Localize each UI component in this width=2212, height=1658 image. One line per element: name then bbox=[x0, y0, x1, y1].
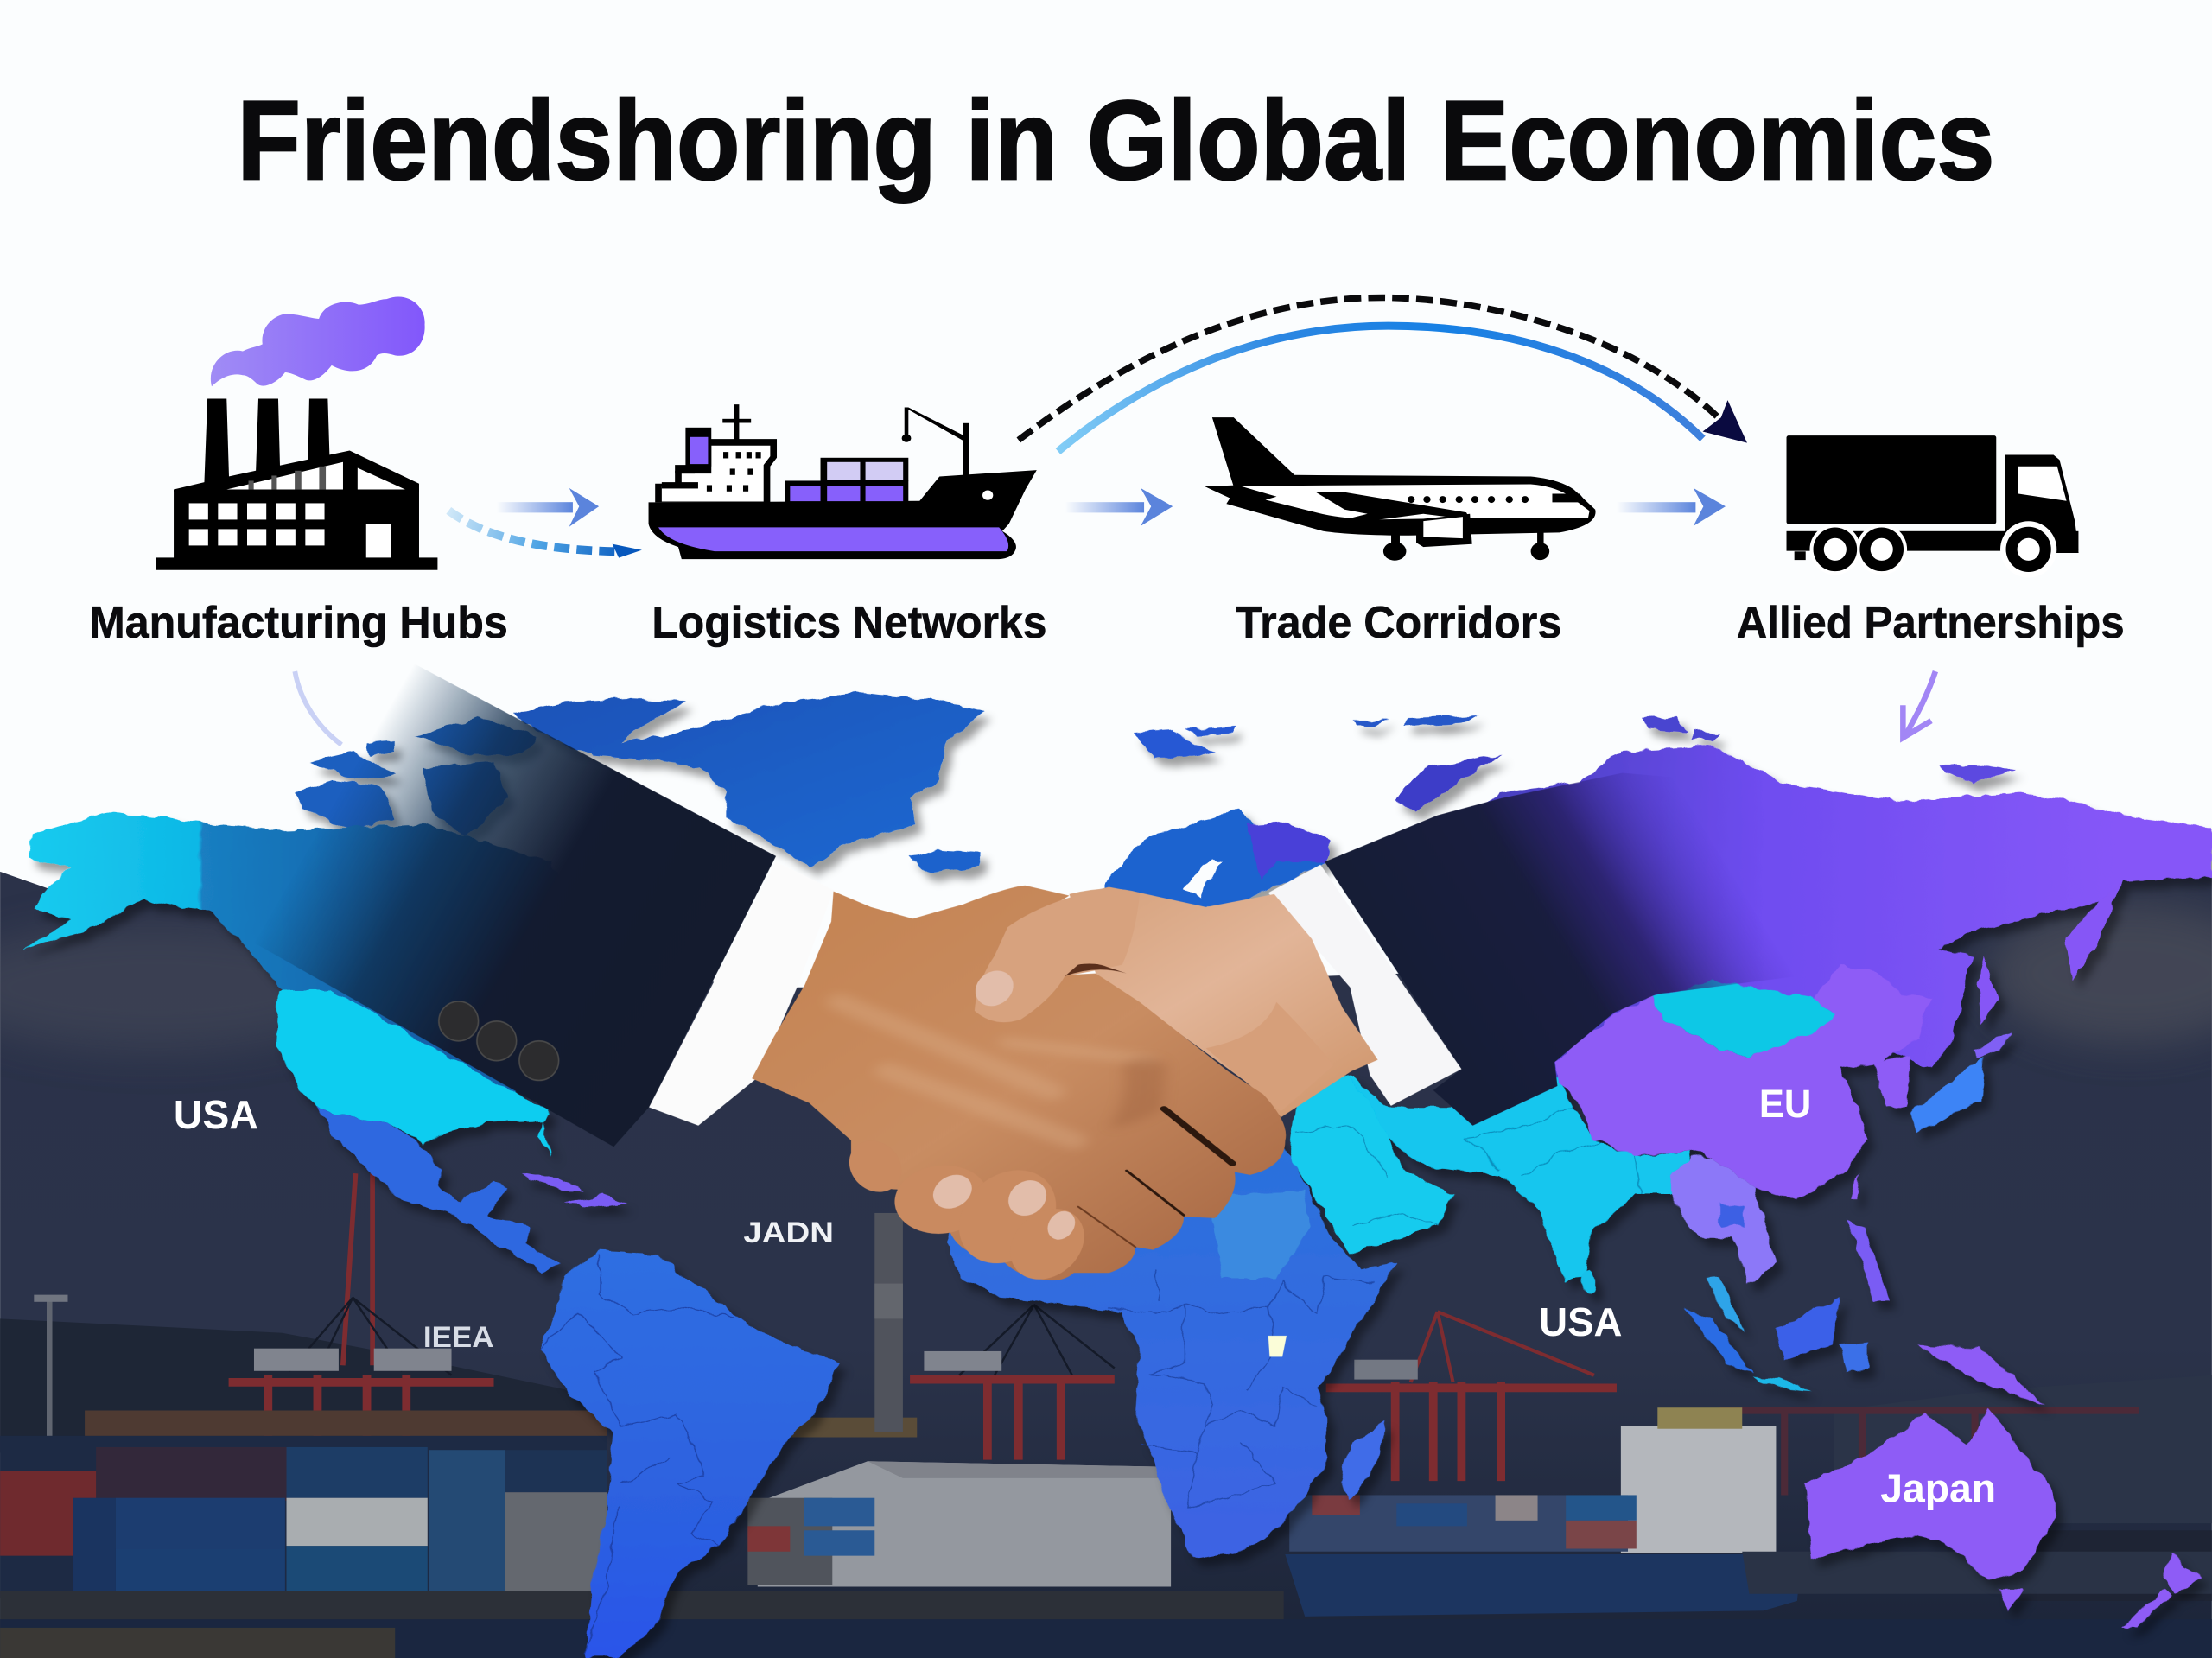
arrow: factory to ship bbox=[497, 488, 599, 527]
tendon highlights bbox=[840, 1002, 1148, 1140]
map: Eurasia Africa Oceania bbox=[948, 715, 2212, 1627]
map: Americas bbox=[22, 692, 984, 1657]
fingernails bbox=[926, 969, 1079, 1242]
map label: USA (Indian Ocean): USA bbox=[1539, 1299, 1622, 1344]
right hand palm bbox=[1069, 889, 1378, 1117]
pinky and fingertips bbox=[843, 1138, 1096, 1285]
map label: Japan: Japan bbox=[1880, 1466, 1996, 1511]
label: Manufacturing Hubs: Manufacturing Hubs bbox=[89, 598, 508, 648]
arrow: plane to truck bbox=[1617, 488, 1726, 526]
label: Logistics Networks: Logistics Networks bbox=[652, 598, 1046, 648]
left sleeve bbox=[183, 635, 776, 1147]
cargo ship in port bbox=[1621, 1426, 1776, 1553]
right shirt cuff bbox=[1268, 865, 1461, 1106]
handshake bbox=[752, 886, 1378, 1285]
crane group bbox=[229, 1173, 2139, 1495]
title: Friendshoring in Global Economics bbox=[237, 77, 1994, 203]
arrow: dashed arc over plane bbox=[1019, 297, 1719, 440]
label: Allied Partnerships: Allied Partnerships bbox=[1737, 598, 2125, 648]
icon: small marker in East Africa bbox=[1268, 1336, 1287, 1356]
icon: truck bbox=[1787, 435, 2079, 578]
right thumb bbox=[975, 887, 1140, 1022]
icon: cargo ship bbox=[649, 404, 1037, 559]
label: Trade Corridors: Trade Corridors bbox=[1236, 598, 1561, 648]
finger gaps bbox=[963, 1109, 1232, 1247]
left hand back bbox=[752, 886, 1286, 1280]
world map bbox=[22, 692, 2212, 1657]
map label: JADN: JADN bbox=[743, 1217, 834, 1249]
map label: IEEA: IEEA bbox=[423, 1321, 493, 1354]
left shirt cuff bbox=[649, 861, 834, 1126]
knuckle shadow bbox=[1109, 1057, 1166, 1129]
arrow: dashed factory to ship bbox=[448, 511, 642, 558]
warehouse bbox=[758, 1461, 1171, 1587]
background photo: port scene bbox=[0, 872, 2212, 1658]
arrow: partnerships down to map bbox=[1903, 671, 1936, 738]
map label: EU: EU bbox=[1759, 1082, 1811, 1126]
arrow: solid blue arc bbox=[1058, 326, 1703, 451]
icon: airplane bbox=[1205, 417, 1596, 561]
right sleeve bbox=[1325, 773, 1820, 1126]
map label: USA (west): USA bbox=[174, 1092, 258, 1137]
arrowhead: arc end bbox=[1703, 400, 1747, 443]
sleeve buttons bbox=[439, 1001, 559, 1080]
container stacks bbox=[0, 1436, 607, 1598]
icon: factory with smoke bbox=[156, 296, 437, 570]
dock bbox=[0, 1591, 1284, 1628]
arrow: ship to plane bbox=[1065, 488, 1173, 526]
curved accent: left descending line bbox=[295, 671, 341, 745]
